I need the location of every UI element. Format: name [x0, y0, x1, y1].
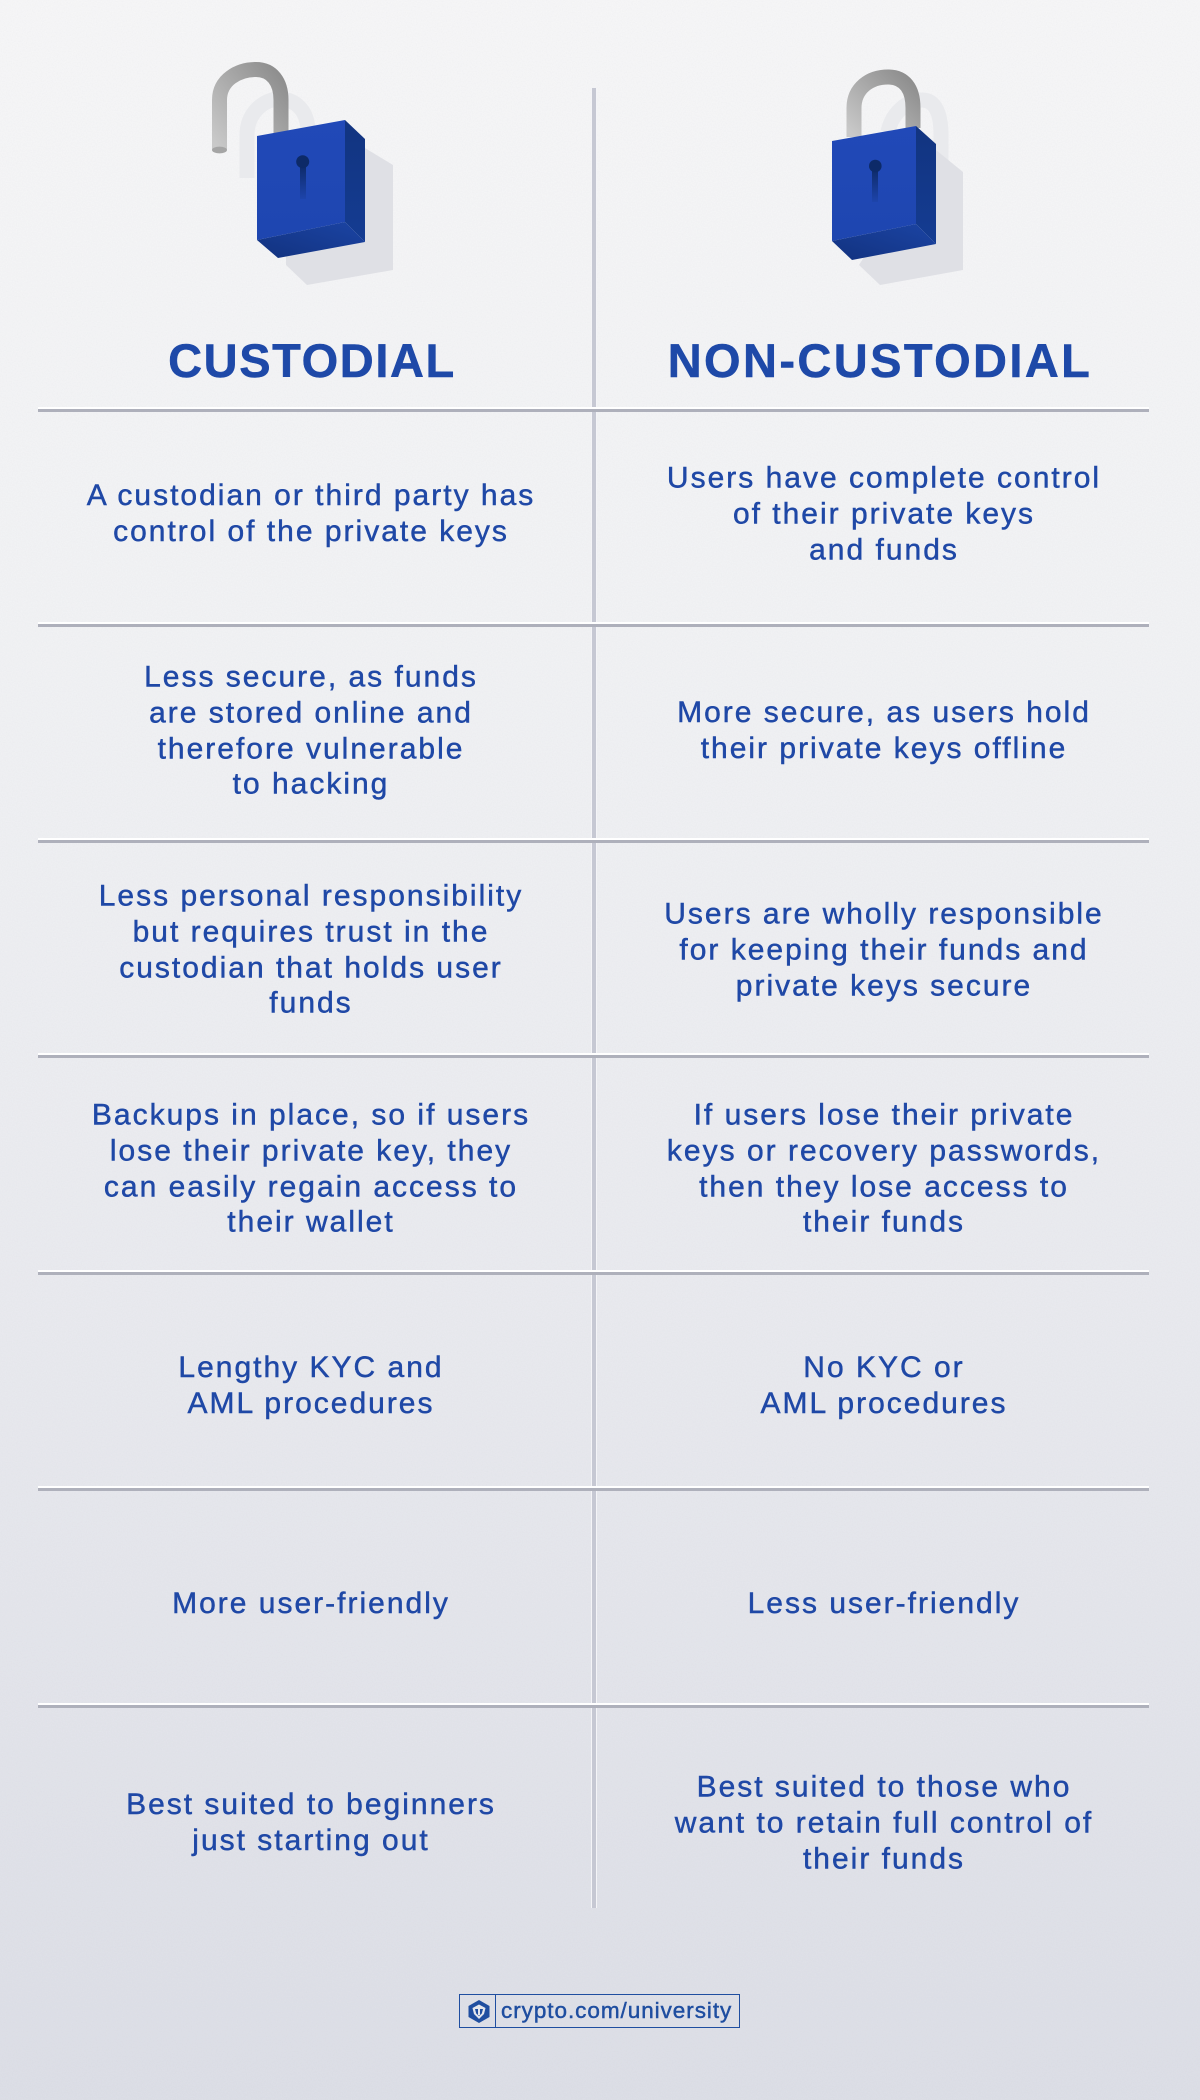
divider: row 4: [38, 1055, 1149, 1058]
text: non-custodial row 5: No KYC or: [803, 1351, 965, 1384]
heading: custodial: CUSTODIAL: [168, 334, 456, 387]
text: custodial row 1: [86, 479, 535, 548]
heading: non-custodial: NON-CUSTODIAL: [668, 334, 1092, 387]
text: custodial row 4: can easily regain access to: [104, 1170, 518, 1203]
text: custodial row 3: but requires trust in the: [133, 915, 489, 948]
text: custodial row 3: custodian that holds user: [119, 951, 503, 984]
text: custodial row 1: control of the private keys: [113, 515, 509, 548]
text: non-custodial row 5: AML procedures: [760, 1387, 1008, 1420]
text: url: crypto.com/university: [501, 1998, 732, 2023]
divider: logo separator: [495, 1995, 496, 2027]
text: non-custodial row 7: Best suited to those who: [697, 1770, 1071, 1803]
text: custodial row 2: are stored online and: [149, 696, 473, 729]
icon: closed padlock: [832, 70, 963, 285]
text: custodial row 7: Best suited to beginners: [126, 1788, 496, 1821]
text: custodial row 6: More user-friendly: [172, 1587, 450, 1620]
text: non-custodial row 4: [667, 1098, 1101, 1239]
text: custodial row 3: Less personal responsibility: [99, 879, 523, 912]
divider: row 2: [38, 624, 1149, 627]
divider: row 1: [38, 409, 1149, 412]
text: non-custodial row 2: their private keys offline: [701, 732, 1067, 765]
icon: crypto.com logo: [468, 2000, 490, 2023]
text: non-custodial row 4: keys or recovery passwords,: [667, 1134, 1101, 1167]
text: non-custodial row 4: then they lose access to: [699, 1170, 1069, 1203]
text: non-custodial row 7: want to retain full control of: [675, 1806, 1093, 1839]
text: custodial row 4: lose their private key, they: [110, 1134, 512, 1167]
text: non-custodial row 3: for keeping their funds and: [679, 933, 1089, 966]
icon: open padlock: [212, 62, 393, 285]
text: non-custodial row 3: Users are wholly responsible: [664, 897, 1104, 930]
text: custodial row 2: to hacking: [233, 768, 389, 801]
text: non-custodial row 5: [760, 1351, 1008, 1420]
text: non-custodial row 1: [667, 461, 1101, 566]
text: non-custodial row 6: Less user-friendly: [748, 1587, 1020, 1620]
text: custodial row 3: [99, 879, 523, 1020]
text: custodial row 5: AML procedures: [188, 1387, 434, 1420]
text: custodial row 4: [92, 1098, 530, 1239]
text: custodial row 5: Lengthy KYC and: [178, 1351, 444, 1384]
text: non-custodial row 4: their funds: [803, 1206, 965, 1239]
text: custodial row 4: their wallet: [227, 1206, 395, 1239]
text: custodial row 5: [178, 1351, 444, 1420]
text: non-custodial row 1: and funds: [809, 533, 959, 566]
text: non-custodial row 7: their funds: [803, 1842, 965, 1875]
footer: crypto.com/university badge: [459, 1994, 740, 2028]
text: non-custodial row 1: Users have complete control: [667, 461, 1101, 494]
text: custodial row 7: [126, 1788, 496, 1857]
text: custodial row 2: Less secure, as funds: [144, 660, 478, 693]
text: non-custodial row 7: [674, 1770, 1093, 1875]
divider: row 5: [38, 1272, 1149, 1275]
divider: row 6: [38, 1488, 1149, 1491]
text: non-custodial row 2: More secure, as users hold: [677, 696, 1091, 729]
text: non-custodial row 3: private keys secure: [736, 969, 1032, 1002]
divider: row 3: [38, 840, 1149, 843]
text: non-custodial row 1: of their private keys: [733, 497, 1035, 530]
text: custodial row 4: Backups in place, so if users: [92, 1098, 530, 1131]
text: custodial row 7: just starting out: [192, 1824, 430, 1857]
text: non-custodial row 3: [664, 897, 1104, 1002]
text: non-custodial row 4: If users lose their private: [694, 1098, 1074, 1131]
text: custodial row 2: [144, 660, 478, 801]
divider: row 7: [38, 1705, 1149, 1708]
text: custodial row 2: therefore vulnerable: [158, 732, 464, 765]
divider: vertical: [592, 88, 596, 1908]
text: custodial row 3: funds: [269, 987, 353, 1020]
text: non-custodial row 2: [677, 696, 1091, 765]
text: custodial row 1: A custodian or third party has: [87, 479, 535, 512]
